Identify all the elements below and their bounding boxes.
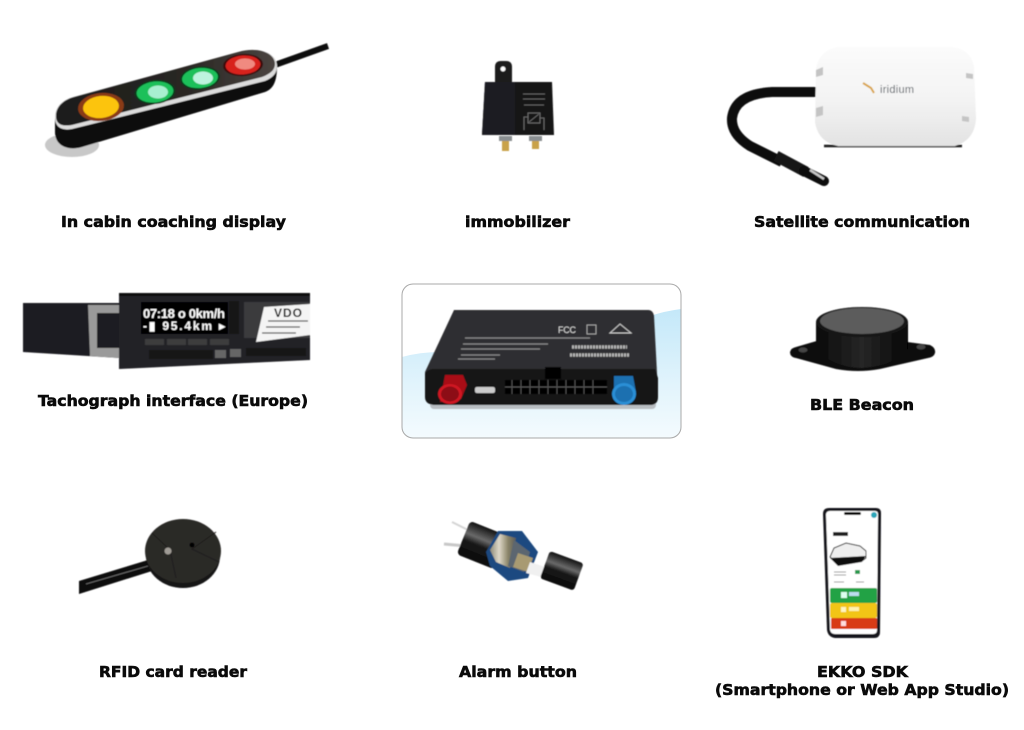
label: tachograph interface: Tachograph interface (Europe): [38, 392, 308, 410]
icon: tachograph unit: VDO: [274, 306, 302, 320]
card background: [402, 284, 681, 438]
icon: BLE beacon puck: [790, 307, 935, 371]
panel: RFID card reader: [79, 519, 248, 681]
icon: tachograph unit: [23, 293, 310, 369]
panel: alarm button: [444, 521, 584, 681]
label: alarm button: Alarm button: [459, 663, 577, 681]
panel: telematics device card: [402, 284, 681, 438]
icon: tachograph unit: -▮ 95.4km ▸: [143, 319, 226, 333]
sky wave background: [402, 309, 681, 438]
panel: BLE beacon: [790, 307, 935, 414]
panel: tachograph interface: [23, 293, 310, 410]
label: EKKO SDK: EKKO SDK: [817, 663, 909, 681]
card border: [402, 284, 681, 438]
icon: satellite modem: [732, 47, 976, 181]
icon: telematics device: FCC: [558, 325, 576, 335]
label: satellite communication: Satellite communication: [754, 213, 970, 231]
label: immobilizer: immobilizer: [465, 213, 571, 231]
icon: tachograph unit: 07:18 o 0km/h: [143, 306, 225, 321]
icon: push button: [444, 521, 584, 591]
icon: smartphone app: [823, 508, 881, 638]
icon: coaching light bar: [45, 46, 328, 157]
label: smartphone or web app studio: (Smartphone or Web App Studio): [715, 681, 1009, 699]
panel: satellite communication: [732, 47, 976, 231]
panel: EKKO SDK: [715, 508, 1009, 699]
label: BLE beacon: BLE Beacon: [810, 396, 914, 414]
icon: telematics device: [425, 310, 658, 409]
label: RFID card reader: RFID card reader: [99, 663, 248, 681]
icon: satellite modem: iridium: [880, 84, 914, 96]
icon: immobilizer relay: [482, 61, 554, 151]
panel: in cabin coaching display: [45, 46, 328, 231]
label: in cabin coaching display: In cabin coaching display: [61, 213, 286, 231]
panel: immobilizer: [465, 61, 571, 231]
icon: RFID reader: [79, 519, 221, 594]
